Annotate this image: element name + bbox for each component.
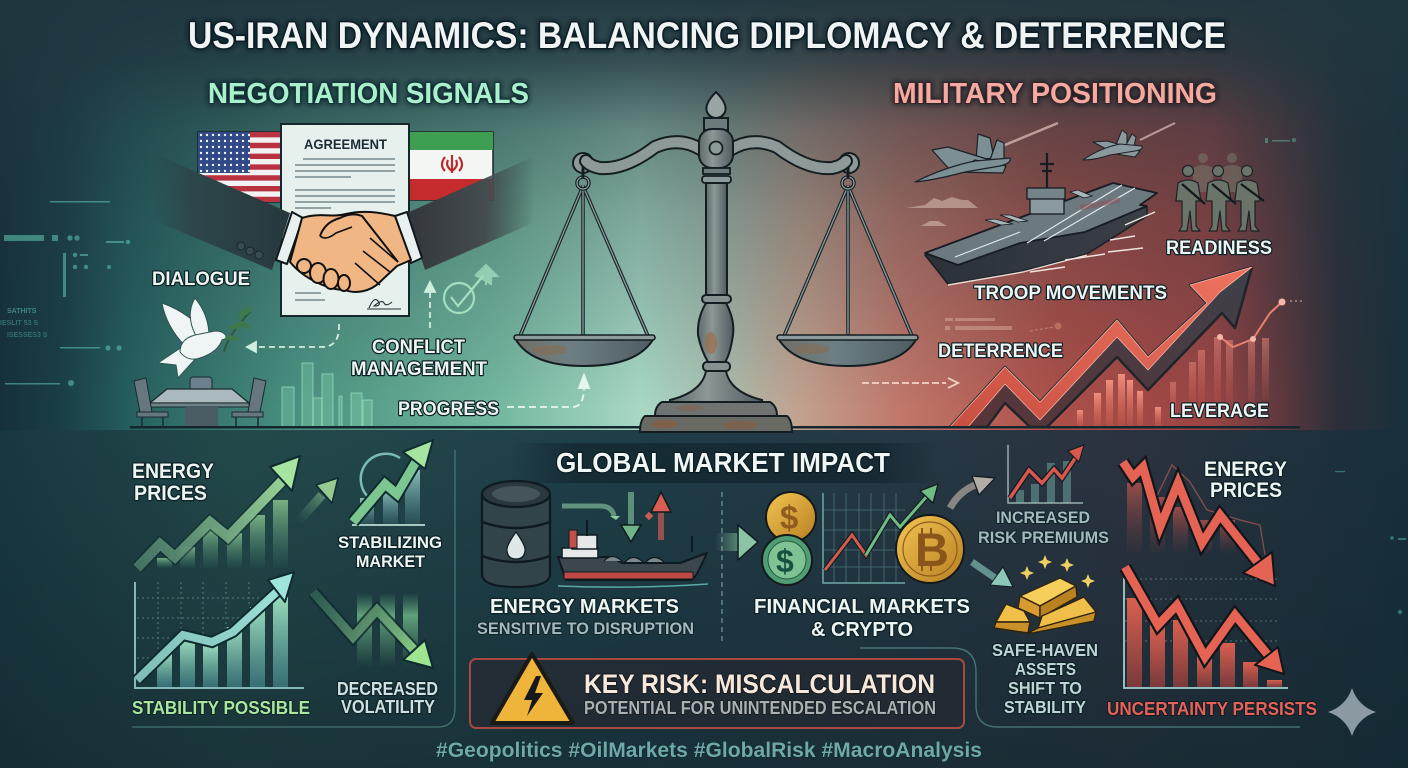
label: deterrence: DETERRENCE bbox=[938, 341, 1063, 362]
label: conflict management bbox=[351, 337, 487, 380]
label: troop movements: TROOP MOVEMENTS bbox=[974, 283, 1167, 304]
hashtags: #Geopolitics #OilMarkets #GlobalRisk #MacroAnalysis bbox=[436, 739, 982, 762]
data noise: left side: IESLIT 53 S bbox=[0, 320, 38, 327]
label: stabilizing market: MARKET bbox=[356, 552, 426, 571]
icon: check with arrow bbox=[444, 265, 497, 313]
arrow: green down bbox=[621, 492, 641, 542]
icon: oil tanker bbox=[558, 520, 708, 587]
chart: progress bars bbox=[282, 363, 372, 427]
dashed arrow: up to handshake bbox=[425, 282, 435, 328]
sub-label: sensitive to disruption: SENSITIVE TO DISRUPTION bbox=[477, 619, 694, 638]
arrow: to safe haven bbox=[972, 562, 1013, 587]
icon: warning triangle bbox=[492, 654, 573, 723]
chains: right bbox=[784, 186, 912, 336]
chart: decreased volatility bbox=[313, 592, 433, 668]
data bits above deterrence bbox=[945, 318, 1062, 331]
callout: key risk bbox=[470, 654, 964, 728]
label: safe-haven assets: SAFE-HAVEN bbox=[992, 640, 1098, 660]
icon: four-point star bbox=[1328, 688, 1376, 736]
label: safe-haven assets: ASSETS bbox=[1015, 659, 1076, 679]
label: increased risk premiums: RISK PREMIUMS bbox=[978, 529, 1109, 547]
label: financial markets and crypto: & CRYPTO bbox=[811, 619, 913, 641]
panel: military positioning bbox=[862, 78, 1302, 428]
label: energy prices right: ENERGY bbox=[1204, 458, 1287, 481]
label: readiness: READINESS bbox=[1166, 238, 1272, 259]
left pan bbox=[514, 335, 655, 366]
inner dashed divider bbox=[721, 492, 723, 643]
dashed arrow: agreement to dove bbox=[247, 324, 339, 352]
icon: dove with olive branch bbox=[158, 298, 252, 378]
key risk heading: KEY RISK: MISCALCULATION bbox=[584, 669, 935, 699]
label: stabilizing market bbox=[338, 533, 442, 571]
label: financial markets and crypto: FINANCIAL MARKETS bbox=[754, 596, 970, 618]
label: conflict management: MANAGEMENT bbox=[351, 359, 487, 380]
dashed arrow: progress to scale bbox=[507, 375, 589, 407]
icon: gold bars bbox=[994, 578, 1096, 633]
data noise: left side: ISESSES3 S bbox=[7, 332, 48, 339]
icon: green dollar coin bbox=[762, 535, 812, 585]
chart: stabilizing market bbox=[352, 440, 433, 526]
arrow: energy to finance bbox=[715, 525, 758, 560]
icon: soldiers bbox=[1176, 153, 1264, 231]
label: energy prices left: PRICES bbox=[134, 482, 207, 505]
divider line bbox=[130, 426, 1300, 428]
heading: global market impact: GLOBAL MARKET IMPACT bbox=[556, 447, 890, 478]
heading: negotiation signals: NEGOTIATION SIGNALS bbox=[208, 78, 529, 110]
data noise: right side bbox=[1265, 138, 1406, 614]
right pan bbox=[777, 335, 918, 366]
arrow: to risk premiums bbox=[950, 476, 995, 508]
arrow: big escalation arrow bbox=[950, 267, 1252, 427]
data noise: left side bbox=[0, 201, 130, 386]
right sleeve bbox=[407, 157, 533, 270]
label: decreased volatility: DECREASED bbox=[337, 679, 438, 699]
bracket line bbox=[860, 648, 1300, 727]
panel: global market impact bbox=[470, 443, 1300, 728]
arrow: red up bbox=[645, 492, 671, 540]
chart: rising energy prices bbox=[137, 456, 300, 568]
icon: green dollar coin: $ bbox=[776, 543, 794, 579]
label: leverage: LEVERAGE bbox=[1170, 401, 1269, 422]
label: increased risk premiums bbox=[978, 509, 1109, 547]
balance scale bbox=[514, 92, 918, 432]
chart: increased risk premiums bbox=[1008, 445, 1084, 503]
chains: left bbox=[520, 186, 648, 336]
icon: jet aircraft 1 bbox=[915, 123, 1058, 182]
icon: negotiation table bbox=[134, 377, 266, 428]
key risk subtext: POTENTIAL FOR UNINTENDED ESCALATION bbox=[584, 698, 936, 718]
icon: bitcoin coin bbox=[896, 515, 964, 583]
icon: aircraft carrier bbox=[925, 153, 1157, 285]
chart: stability bars bbox=[135, 572, 304, 688]
icon: clouds bbox=[906, 197, 978, 226]
label: safe-haven assets bbox=[992, 640, 1098, 717]
chart: falling energy prices bbox=[1123, 462, 1275, 586]
label: energy markets: ENERGY MARKETS bbox=[490, 596, 679, 618]
arrow: curved flow bbox=[562, 506, 620, 520]
heading: military positioning: MILITARY POSITIONING bbox=[893, 78, 1217, 110]
document: agreement bbox=[281, 124, 409, 316]
label: energy prices left: ENERGY bbox=[132, 460, 214, 483]
column bbox=[706, 92, 726, 118]
label: energy prices right bbox=[1204, 458, 1287, 502]
icon: Iran flag bbox=[408, 132, 493, 200]
label: increased risk premiums: INCREASED bbox=[996, 509, 1090, 527]
icon: bitcoin coin: B bbox=[915, 523, 949, 576]
handshake bbox=[153, 153, 533, 292]
label: stabilizing market: STABILIZING bbox=[338, 533, 442, 552]
label: financial markets and crypto bbox=[754, 596, 970, 641]
label: decreased volatility: VOLATILITY bbox=[341, 697, 435, 717]
label: safe-haven assets: SHIFT TO bbox=[1008, 678, 1082, 698]
chart: uncertainty bars bbox=[1124, 567, 1288, 688]
beam bbox=[573, 142, 859, 173]
chart: leverage bars bbox=[1077, 298, 1302, 428]
heading backdrop bbox=[510, 443, 940, 483]
label: energy prices right: PRICES bbox=[1210, 479, 1282, 502]
icon: gold dollar coin bbox=[766, 492, 816, 542]
label: conflict management: CONFLICT bbox=[372, 337, 465, 358]
document title: AGREEMENT bbox=[304, 136, 387, 152]
panel border bbox=[132, 450, 455, 727]
label: dialogue: DIALOGUE bbox=[152, 269, 250, 290]
icon: jet aircraft 2 bbox=[1083, 123, 1175, 160]
icon: gold dollar coin: $ bbox=[780, 499, 798, 536]
arrow: small rising arrow bbox=[298, 478, 338, 522]
chart: financial line chart bbox=[823, 484, 938, 583]
data noise: left side: SATHITS bbox=[7, 308, 37, 315]
icon: US flag bbox=[198, 132, 282, 202]
label: uncertainty persists: UNCERTAINTY PERSISTS bbox=[1107, 698, 1317, 719]
panel: stability charts bbox=[132, 440, 455, 727]
dashed arrow: scale to deterrence bbox=[862, 378, 958, 388]
title: US-IRAN DYNAMICS: BALANCING DIPLOMACY & DETERRENCE bbox=[188, 15, 1226, 56]
label: energy markets bbox=[477, 596, 694, 638]
icon: sparkles bbox=[1020, 555, 1095, 588]
label: energy prices left bbox=[132, 460, 214, 505]
label: decreased volatility bbox=[337, 679, 438, 717]
icon: oil barrel bbox=[482, 481, 550, 587]
label: stability possible: STABILITY POSSIBLE bbox=[132, 698, 310, 718]
label: progress: PROGRESS bbox=[398, 399, 499, 420]
label: safe-haven assets: STABILITY bbox=[1004, 697, 1086, 717]
left sleeve bbox=[153, 153, 290, 270]
panel: negotiation signals bbox=[134, 78, 589, 428]
panel: uncertainty charts bbox=[1107, 458, 1317, 719]
